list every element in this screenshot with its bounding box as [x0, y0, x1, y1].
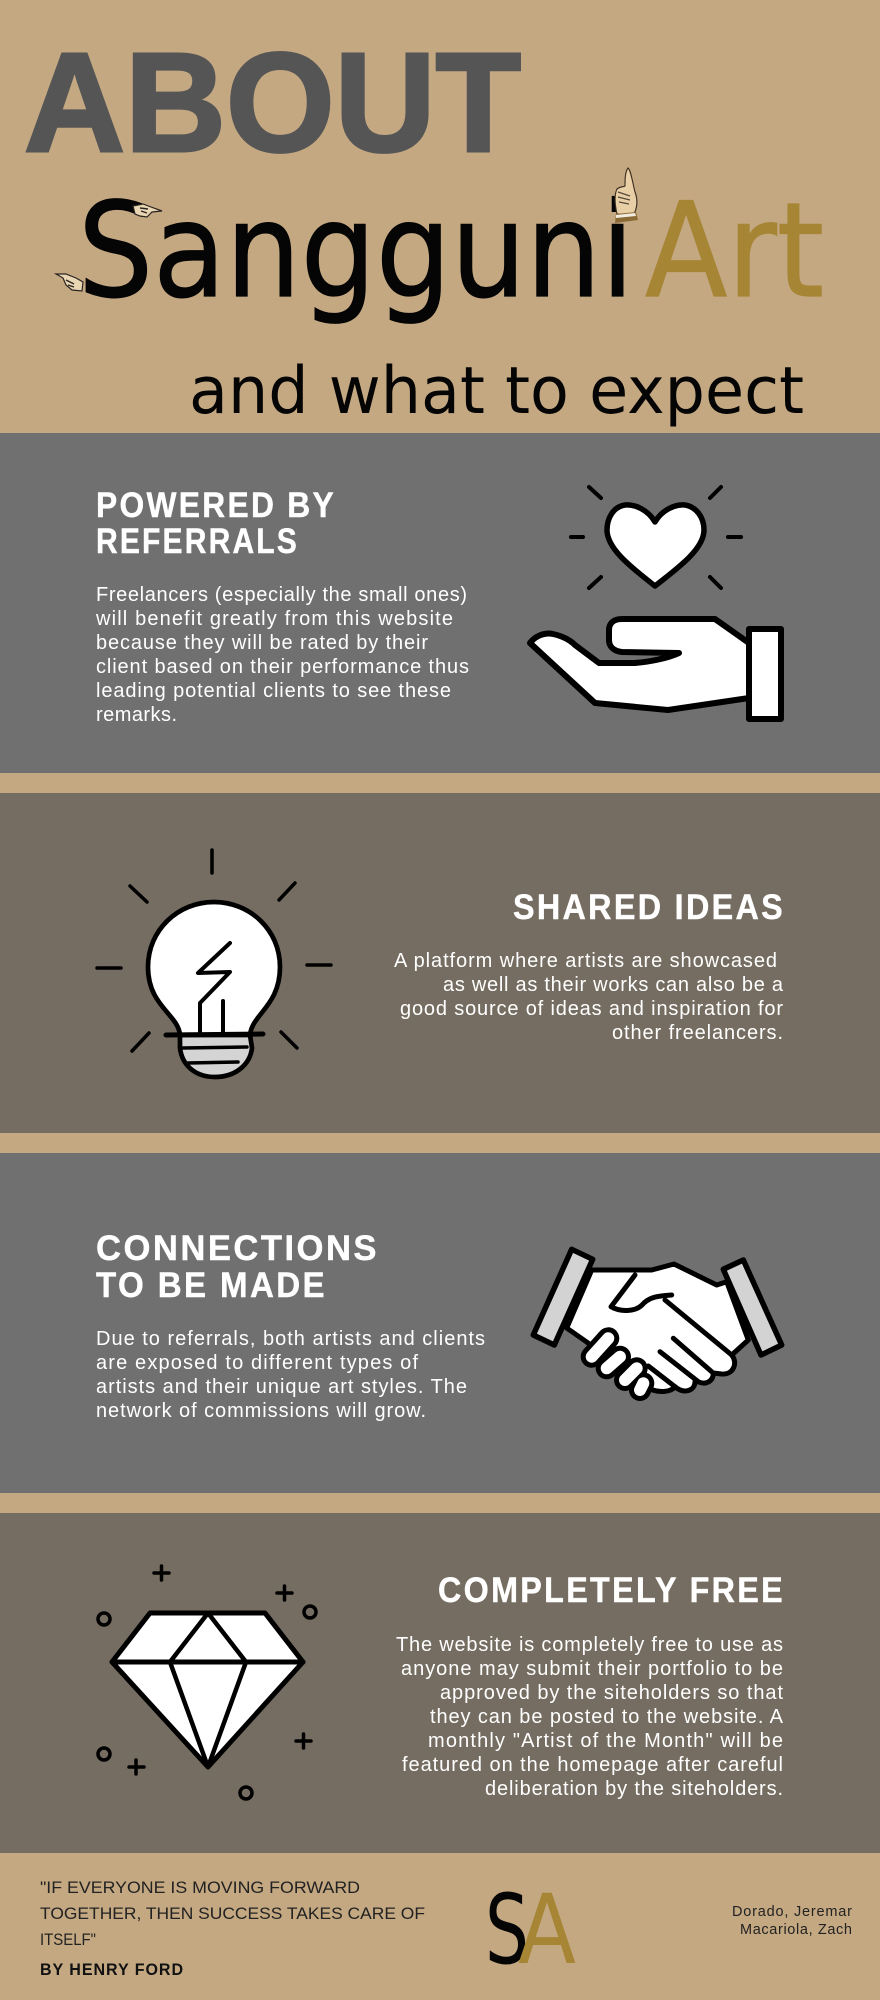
body text: client based on their performance thus	[96, 656, 469, 678]
icon: handshake	[533, 1249, 782, 1391]
footer authors: Dorado, Jeremar	[732, 1904, 852, 1920]
footer authors: Macariola, Zach	[740, 1922, 852, 1938]
footer quote: "IF EVERYONE IS MOVING FORWARD	[40, 1878, 360, 1897]
body text: as well as their works can also be a	[443, 974, 784, 996]
panel: powered by referrals	[0, 433, 880, 773]
body text	[396, 1634, 784, 1800]
icon: pointing hand, upper S terminal	[133, 204, 162, 217]
heading: CONNECTIONS	[96, 1229, 379, 1268]
title: SangguniArt logotype: Art	[645, 174, 824, 327]
logo: SA: S	[485, 1874, 529, 1986]
logo: SA: A	[518, 1874, 576, 1986]
icon: light bulb	[97, 850, 331, 1077]
body text: remarks.	[96, 704, 177, 726]
body text: are exposed to different types of	[96, 1352, 418, 1374]
body text: network of commissions will grow.	[96, 1400, 426, 1422]
body text: A platform where artists are showcased	[394, 950, 777, 972]
panel: connections to be made	[0, 1153, 880, 1493]
body text: featured on the homepage after careful	[402, 1754, 783, 1776]
logo: SA	[485, 1874, 576, 1986]
body text: artists and their unique art styles. The	[96, 1376, 467, 1398]
body text: good source of ideas and inspiration for	[400, 998, 783, 1020]
body text: leading potential clients to see these	[96, 680, 451, 702]
footer authors	[732, 1904, 852, 1938]
body text	[394, 950, 784, 1044]
body text: monthly "Artist of the Month" will be	[428, 1730, 783, 1752]
heading	[96, 486, 336, 561]
icon: hand holding heart	[530, 487, 781, 719]
heading: POWERED BY	[96, 486, 336, 525]
body text	[95, 584, 469, 726]
body text: Due to referrals, both artists and clients	[96, 1328, 485, 1350]
body text: will benefit greatly from this website	[95, 608, 453, 630]
quote attribution: BY HENRY FORD	[40, 1960, 184, 1979]
footer quote: ITSELF"	[40, 1930, 96, 1949]
icon: hand pointing up over the i	[615, 168, 638, 223]
heading	[96, 1229, 379, 1305]
heading: SHARED IDEAS	[513, 888, 785, 927]
heading: COMPLETELY FREE	[438, 1571, 785, 1610]
footer quote: TOGETHER, THEN SUCCESS TAKES CARE OF	[40, 1904, 425, 1923]
title: SangguniArt logotype: Sangguni	[78, 174, 634, 327]
panel: shared ideas	[0, 793, 880, 1133]
subtitle: and what to expect	[189, 354, 804, 429]
title: ABOUT: ABOUT	[24, 23, 521, 181]
body text	[96, 1328, 485, 1422]
footer quote	[40, 1878, 425, 1979]
body text: The website is completely free to use as	[396, 1634, 783, 1656]
body text: deliberation by the siteholders.	[485, 1778, 783, 1800]
body text: because they will be rated by their	[96, 632, 428, 654]
panel: completely free	[0, 1513, 880, 1853]
body text: they can be posted to the website. A	[430, 1706, 784, 1728]
body text: approved by the siteholders so that	[440, 1682, 783, 1704]
body text: anyone may submit their portfolio to be	[401, 1658, 783, 1680]
heading: REFERRALS	[96, 522, 299, 561]
icon: pointing hand, lower S terminal	[56, 274, 83, 291]
body text: Freelancers (especially the small ones)	[96, 584, 467, 606]
heading: TO BE MADE	[96, 1266, 327, 1305]
icon: diamond	[98, 1566, 316, 1799]
body text: other freelancers.	[612, 1022, 783, 1044]
